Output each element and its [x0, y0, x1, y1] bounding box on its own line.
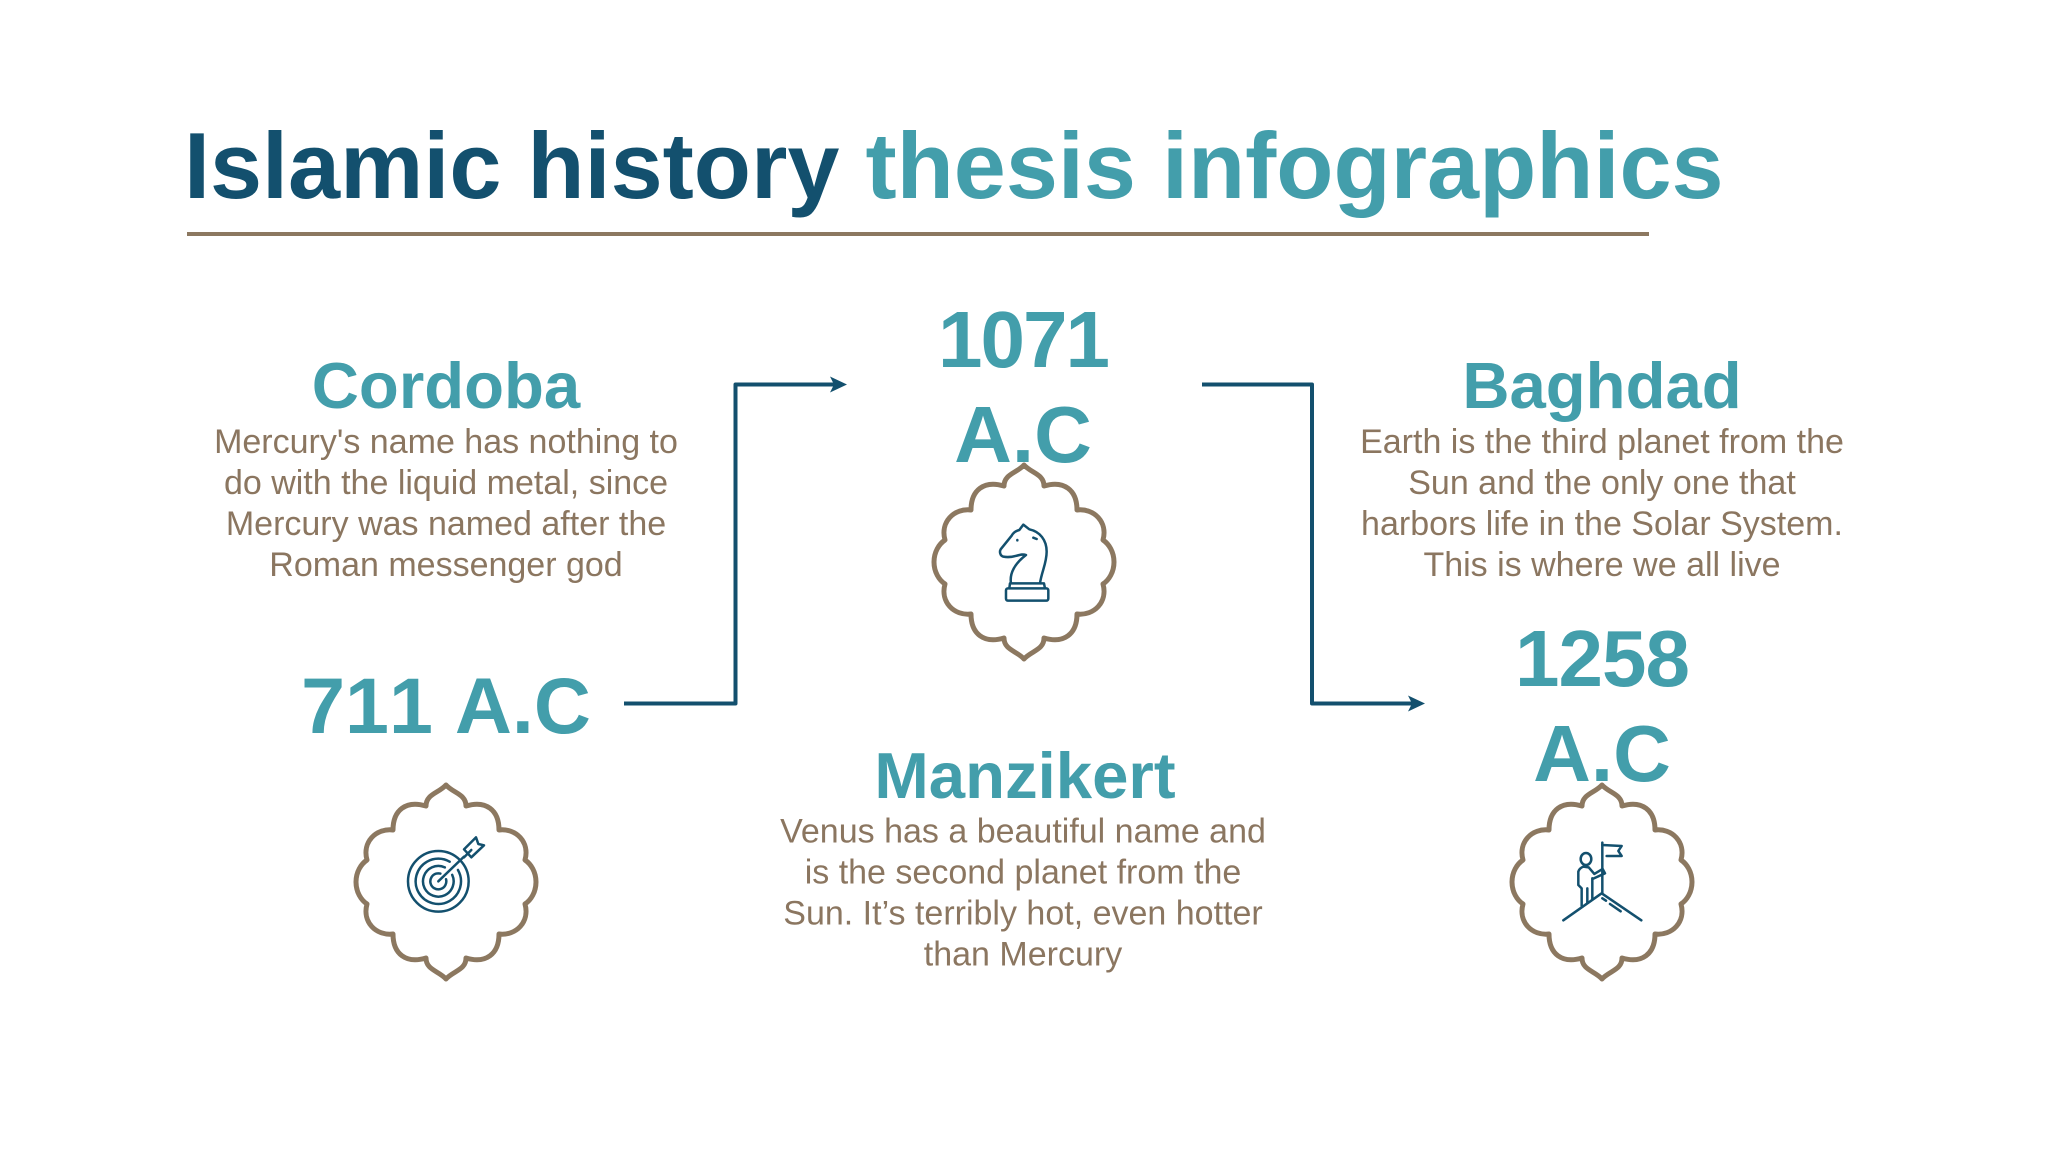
text block: Baghdad description: Earth is the third planet from the: [1360, 423, 1844, 461]
text block: Cordoba description: Mercury's name has nothing to: [214, 423, 678, 461]
text block: Baghdad description: Sun and the only one that: [1408, 464, 1796, 502]
year: 1071 A.C: A.C: [954, 390, 1092, 479]
text block: Manzikert description: Sun. It’s terribly hot, even hotter: [783, 894, 1263, 932]
arrow: 1071 to 1258: [1202, 384, 1425, 712]
heading: Manzikert: Manzikert: [874, 739, 1176, 812]
icon: target badge: [356, 785, 536, 979]
text block: Baghdad description: harbors life in the Solar System.: [1361, 505, 1843, 543]
panel: Cordoba: [214, 349, 678, 979]
text block: Manzikert description: is the second planet from the: [805, 854, 1241, 892]
icon: chess knight badge: [934, 465, 1114, 659]
year: 1071 A.C: 1071: [938, 295, 1108, 384]
year: 711 A.C: 711 A.C: [301, 661, 591, 750]
text block: Manzikert description: than Mercury: [924, 936, 1122, 974]
text block: Manzikert description: Venus has a beautiful name and: [780, 812, 1266, 850]
panel: Manzikert: [780, 295, 1266, 974]
icon: summit flag badge: [1512, 785, 1692, 979]
text block: Cordoba description: Roman messenger god: [269, 546, 623, 584]
panel: Baghdad: [1360, 349, 1844, 979]
arrow: 711 to 1071: [624, 376, 847, 704]
title: Islamic history thesis infographics: [184, 113, 1724, 218]
year: 1258 A.C: A.C: [1533, 709, 1671, 798]
text block: Cordoba description: do with the liquid metal, since: [224, 464, 668, 502]
title underline: [187, 232, 1649, 236]
text block: Cordoba description: Mercury was named after the: [226, 505, 666, 543]
text block: Baghdad description: This is where we all live: [1423, 546, 1781, 584]
heading: Cordoba: Cordoba: [312, 349, 581, 422]
heading: Baghdad: Baghdad: [1462, 349, 1742, 422]
year: 1258 A.C: 1258: [1515, 614, 1689, 703]
